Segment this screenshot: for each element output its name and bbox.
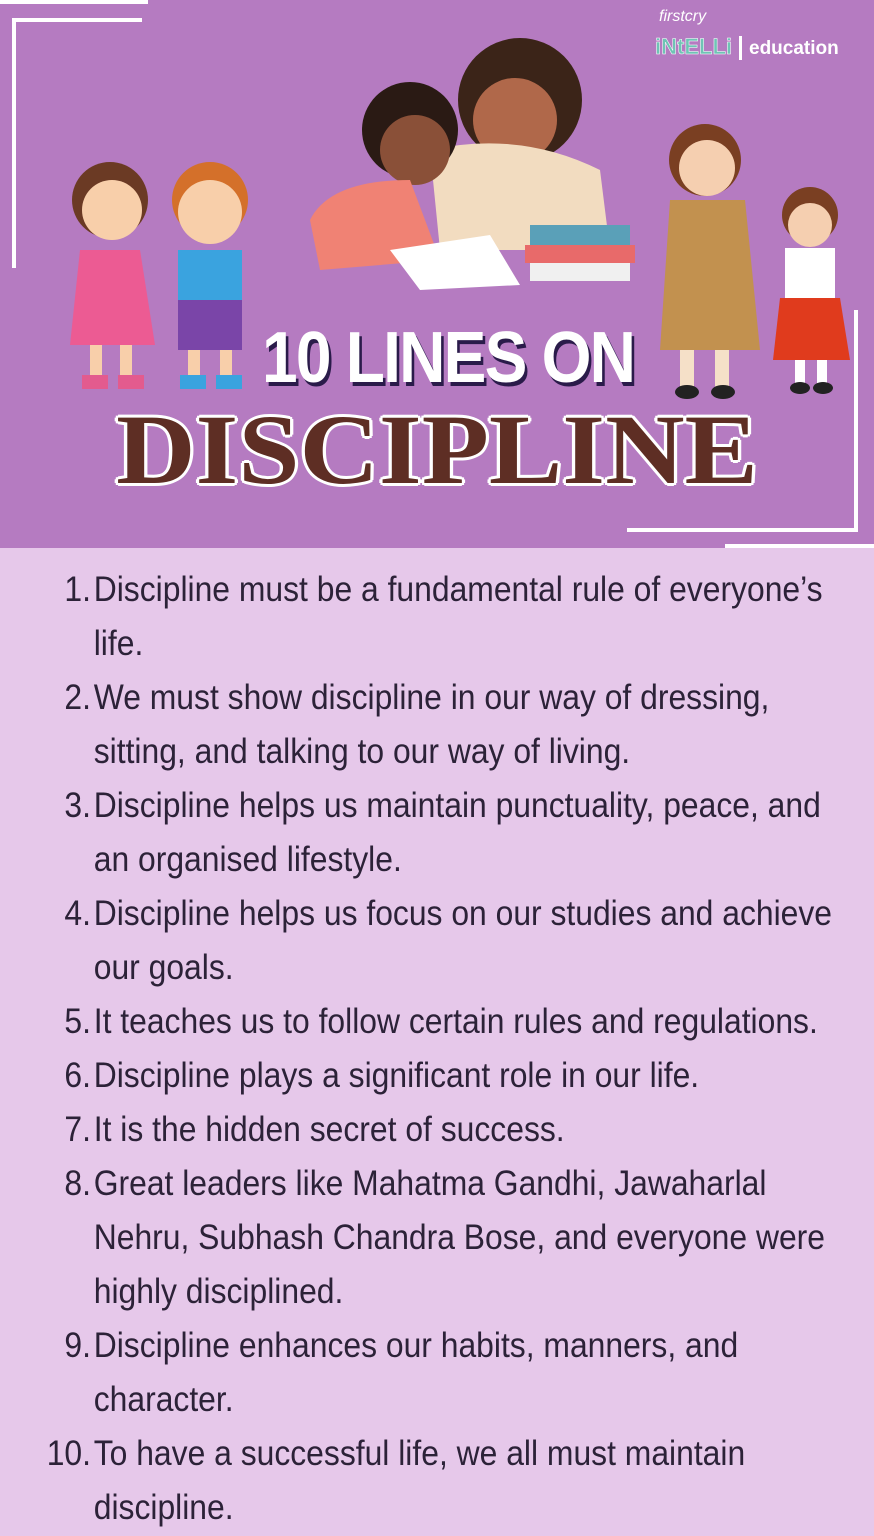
list of 10 lines: life. [94,624,143,663]
list of 10 lines: To have a successful life, we all must maintain [94,1434,745,1473]
list of 10 lines: character. [94,1380,234,1419]
list of 10 lines: discipline. [94,1488,234,1527]
list of 10 lines: 2. [64,678,91,717]
list of 10 lines: 9. [64,1326,91,1365]
logo: iNtELLi [655,34,732,59]
list of 10 lines: Discipline helps us maintain punctuality, peace, and [94,786,821,825]
list of 10 lines: Discipline plays a significant role in our life. [94,1056,699,1095]
list of 10 lines: 1. [64,570,91,609]
list of 10 lines: Nehru, Subhash Chandra Bose, and everyone were [94,1218,825,1257]
list of 10 lines: 6. [64,1056,91,1095]
list of 10 lines: It is the hidden secret of success. [94,1110,565,1149]
illustration: parent and child studying [310,38,635,290]
title: 10 lines on: 10 LINES ON [262,318,634,398]
logo [655,8,839,60]
list of 10 lines: Discipline enhances our habits, manners, and [94,1326,738,1365]
title: discipline: DISCIPLINE [116,394,758,505]
list of 10 lines: It teaches us to follow certain rules and regulations. [94,1002,818,1041]
list of 10 lines [47,570,832,1527]
list of 10 lines: We must show discipline in our way of dressing, [94,678,769,717]
list of 10 lines: sitting, and talking to our way of living. [94,732,630,771]
illustration: kids [70,162,248,389]
logo: education [749,38,839,59]
list of 10 lines: 8. [64,1164,91,1203]
list of 10 lines: 7. [64,1110,91,1149]
list of 10 lines: 5. [64,1002,91,1041]
list of 10 lines: highly disciplined. [94,1272,343,1311]
list of 10 lines: Discipline helps us focus on our studies and achieve [94,894,832,933]
illustration: teacher and student [660,124,850,399]
list of 10 lines: 4. [64,894,91,933]
list of 10 lines: our goals. [94,948,234,987]
header panel [0,0,874,548]
list of 10 lines: 3. [64,786,91,825]
list of 10 lines: 10. [47,1434,91,1473]
list of 10 lines: Discipline must be a fundamental rule of everyone’s [94,570,823,609]
logo: firstcry [659,8,706,25]
list of 10 lines: an organised lifestyle. [94,840,402,879]
list of 10 lines: Great leaders like Mahatma Gandhi, Jawaharlal [94,1164,766,1203]
